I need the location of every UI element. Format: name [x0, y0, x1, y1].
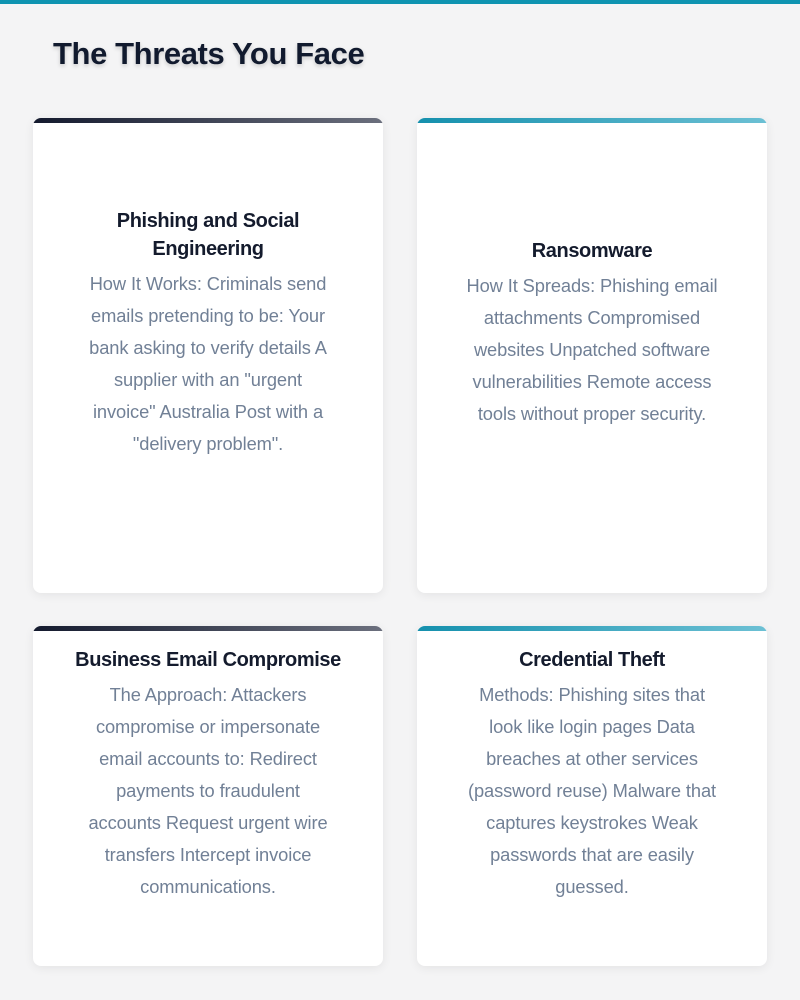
text: phishing: Phishing and Social — [117, 210, 299, 232]
text: credential theft — [468, 649, 716, 897]
title: The Threats You Face — [53, 36, 364, 71]
text: ransomware: tools without proper security. — [478, 403, 706, 424]
text: phishing: Engineering — [152, 238, 264, 260]
text: credential theft: (password reuse) Malware that — [468, 780, 716, 801]
text: credential theft: captures keystrokes Weak — [486, 812, 698, 833]
text: BEC: communications. — [140, 876, 276, 897]
panel: business email compromise — [33, 626, 383, 966]
panel: ransomware — [417, 118, 767, 593]
text: phishing: emails pretending to be: Your — [91, 305, 325, 326]
text: credential theft: Methods: Phishing sites that — [479, 684, 705, 705]
text: ransomware: vulnerabilities Remote access — [473, 371, 711, 392]
text: BEC: compromise or impersonate — [96, 716, 320, 737]
text: BEC: payments to fraudulent — [116, 780, 300, 801]
text: phishing: supplier with an "urgent — [114, 369, 302, 390]
text: BEC: The Approach: Attackers — [110, 684, 306, 705]
text: credential theft: guessed. — [555, 876, 629, 897]
panel: credential theft — [417, 626, 767, 966]
text: credential theft: passwords that are easily — [490, 844, 694, 865]
text: ransomware — [466, 240, 718, 424]
text: phishing: invoice" Australia Post with a — [93, 401, 323, 422]
text: ransomware: attachments Compromised — [484, 307, 700, 328]
text: phishing: How It Works: Criminals send — [90, 273, 326, 294]
text: credential theft: look like login pages Data — [489, 716, 695, 737]
text: phishing — [89, 210, 327, 454]
text: credential theft: Credential Theft — [519, 649, 665, 671]
text: BEC: transfers Intercept invoice — [105, 844, 311, 865]
text: BEC — [75, 649, 341, 897]
text: phishing: "delivery problem". — [133, 433, 283, 454]
text: BEC: Business Email Compromise — [75, 649, 341, 671]
text: ransomware: Ransomware — [532, 240, 652, 262]
panel: phishing — [33, 118, 383, 593]
text: credential theft: breaches at other services — [486, 748, 698, 769]
text: BEC: accounts Request urgent wire — [88, 812, 328, 833]
text: phishing: bank asking to verify details A — [89, 337, 327, 358]
text: ransomware: websites Unpatched software — [474, 339, 710, 360]
text: ransomware: How It Spreads: Phishing email — [466, 275, 718, 296]
text: BEC: email accounts to: Redirect — [99, 748, 317, 769]
